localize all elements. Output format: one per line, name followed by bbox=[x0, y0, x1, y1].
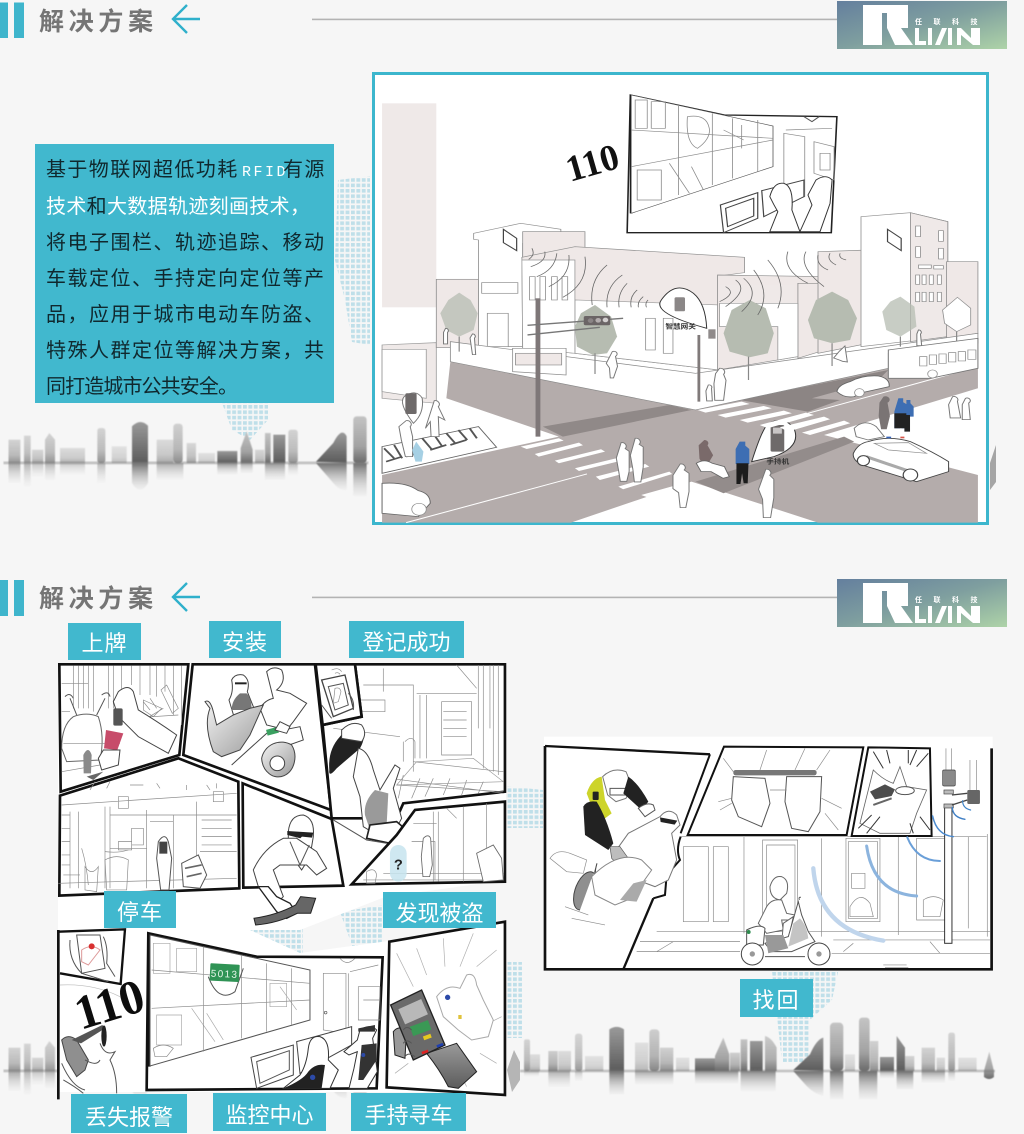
panel: handheld search bbox=[387, 922, 505, 1095]
callout: smart gateway bbox=[660, 288, 707, 330]
callout: smart gateway: 智慧网关 bbox=[665, 322, 696, 330]
logo: 任联科技 bbox=[915, 595, 989, 604]
comic strip, lower bbox=[58, 922, 505, 1099]
description text: 基于物联网超低功耗 bbox=[46, 159, 239, 181]
rider on scooter bbox=[741, 876, 830, 965]
110 label: 110 bbox=[68, 969, 151, 1041]
panel: registered bbox=[323, 664, 505, 845]
header rule bbox=[312, 19, 837, 20]
panel: phone inset bbox=[316, 664, 362, 725]
world-map dot pattern, top section bbox=[222, 176, 370, 440]
police officers bbox=[736, 398, 914, 484]
central building bbox=[522, 247, 744, 370]
label: 安装: 安装 bbox=[222, 630, 268, 655]
header rule bbox=[312, 597, 837, 598]
panel: monitoring centre: 5013 bbox=[210, 969, 239, 981]
110 label: 110 bbox=[561, 137, 624, 191]
world-map dot pattern, lower section bbox=[177, 786, 838, 1062]
city skyline, lower right bbox=[520, 1018, 995, 1099]
traffic light pole bbox=[528, 298, 623, 437]
cars bbox=[382, 376, 889, 517]
comic: recovery panel bbox=[544, 737, 993, 971]
callout: handheld: 手持机 bbox=[766, 457, 789, 465]
signal arcs bbox=[529, 248, 846, 315]
text panel: solution description bbox=[35, 144, 334, 403]
label: 丢失报警: 丢失报警 bbox=[85, 1105, 173, 1130]
street background bbox=[637, 834, 990, 967]
callout: left device bbox=[402, 393, 423, 423]
label: 上牌: 上牌 bbox=[81, 631, 128, 656]
description text: 同打造城市公共安全。 bbox=[46, 375, 238, 398]
label: 登记成功 bbox=[349, 621, 464, 658]
label: 丢失报警 bbox=[71, 1094, 187, 1133]
panel: thief bbox=[243, 783, 343, 925]
comic: white backing, lower block bbox=[58, 925, 506, 1092]
label: 安装 bbox=[209, 621, 281, 658]
logo bbox=[837, 1, 1007, 49]
right building block bbox=[718, 275, 870, 370]
description text bbox=[46, 158, 326, 398]
description text: 品，应用于城市电动车防盗、 bbox=[46, 303, 324, 326]
pink tower at left bbox=[382, 103, 436, 307]
comic strip, upper bbox=[58, 664, 505, 925]
section header 2 bbox=[0, 579, 1007, 627]
panel: install bbox=[183, 664, 331, 810]
right tower bbox=[861, 213, 948, 347]
accent bars bbox=[0, 2, 24, 38]
panel: city street scene bbox=[374, 74, 988, 524]
icon: left arrow bbox=[173, 5, 200, 33]
panel: phone map bbox=[58, 929, 125, 984]
road surface bbox=[382, 353, 978, 523]
heading: 解决方案 bbox=[39, 584, 158, 613]
label: 手持寻车: 手持寻车 bbox=[364, 1103, 453, 1128]
tower with screen bbox=[474, 223, 561, 347]
label: 停车: 停车 bbox=[117, 900, 163, 925]
cash in hand bbox=[104, 730, 123, 750]
logo bbox=[837, 579, 1007, 627]
guard booth bbox=[513, 348, 566, 375]
label: 监控中心: 监控中心 bbox=[225, 1103, 314, 1128]
trees bbox=[440, 292, 971, 380]
panel: license plate bbox=[59, 664, 188, 792]
panel: alarm call bbox=[58, 930, 151, 1099]
far right building bbox=[947, 262, 978, 338]
crosswalk stripes bbox=[521, 438, 677, 497]
label: 登记成功: 登记成功 bbox=[362, 630, 451, 655]
panel: key fob bbox=[852, 747, 932, 836]
description text: 将电子围栏、轨迹追踪、移动 bbox=[46, 231, 324, 254]
city skyline, right of scene bbox=[990, 445, 996, 490]
bus bbox=[888, 338, 978, 378]
panel: theft discovered bbox=[352, 802, 505, 884]
callout: handheld bbox=[752, 420, 796, 465]
description text: 技术和大数据轨迹刻画技术， bbox=[46, 195, 310, 218]
section header 1 bbox=[0, 1, 1007, 49]
signal waves bbox=[813, 801, 971, 941]
accent bars bbox=[0, 580, 24, 616]
skyline fragment beside comic panels bbox=[507, 1050, 520, 1092]
label: 停车 bbox=[104, 891, 176, 928]
gateway pole and device bbox=[697, 329, 716, 402]
description text: 特殊人群定位等解决方案，共 bbox=[46, 339, 324, 362]
rooftop screens bbox=[503, 229, 517, 251]
city skyline, lower left bbox=[3, 1024, 368, 1104]
low building left bbox=[436, 279, 478, 348]
label: 监控中心 bbox=[213, 1093, 326, 1131]
label: 上牌 bbox=[68, 623, 141, 660]
label: 发现被盗: 发现被盗 bbox=[395, 901, 484, 926]
panel: arrest bbox=[545, 746, 710, 969]
label: 手持寻车 bbox=[351, 1093, 466, 1131]
panel: theft discovered: ? bbox=[394, 858, 403, 874]
pedestrians bbox=[399, 328, 970, 518]
inset: monitoring centre bbox=[627, 95, 837, 233]
panel: monitoring centre bbox=[147, 933, 383, 1090]
lower left building bbox=[382, 343, 436, 403]
city skyline, top section bbox=[3, 416, 368, 496]
road shadows bbox=[740, 370, 888, 412]
street pole with gateway bbox=[943, 748, 980, 943]
description text: RFID bbox=[242, 164, 288, 181]
dark and blue figures bbox=[412, 396, 890, 478]
parked scooters bbox=[382, 427, 497, 473]
perimeter wall bbox=[450, 333, 978, 410]
icon: left arrow bbox=[173, 583, 200, 611]
description text: 车载定位、手持定向定位等产 bbox=[46, 267, 324, 290]
comic: white backing, top block bbox=[58, 663, 506, 930]
label: 找回 bbox=[740, 979, 813, 1017]
police car bbox=[853, 437, 949, 482]
label: 找回: 找回 bbox=[752, 988, 801, 1013]
label: 发现被盗 bbox=[383, 892, 496, 928]
heading: 解决方案 bbox=[39, 7, 158, 36]
panel: handcuffs bbox=[688, 747, 863, 835]
description text: 有源 bbox=[283, 158, 326, 181]
logo: 任联科技 bbox=[915, 17, 989, 26]
panel: parked bbox=[58, 758, 239, 896]
